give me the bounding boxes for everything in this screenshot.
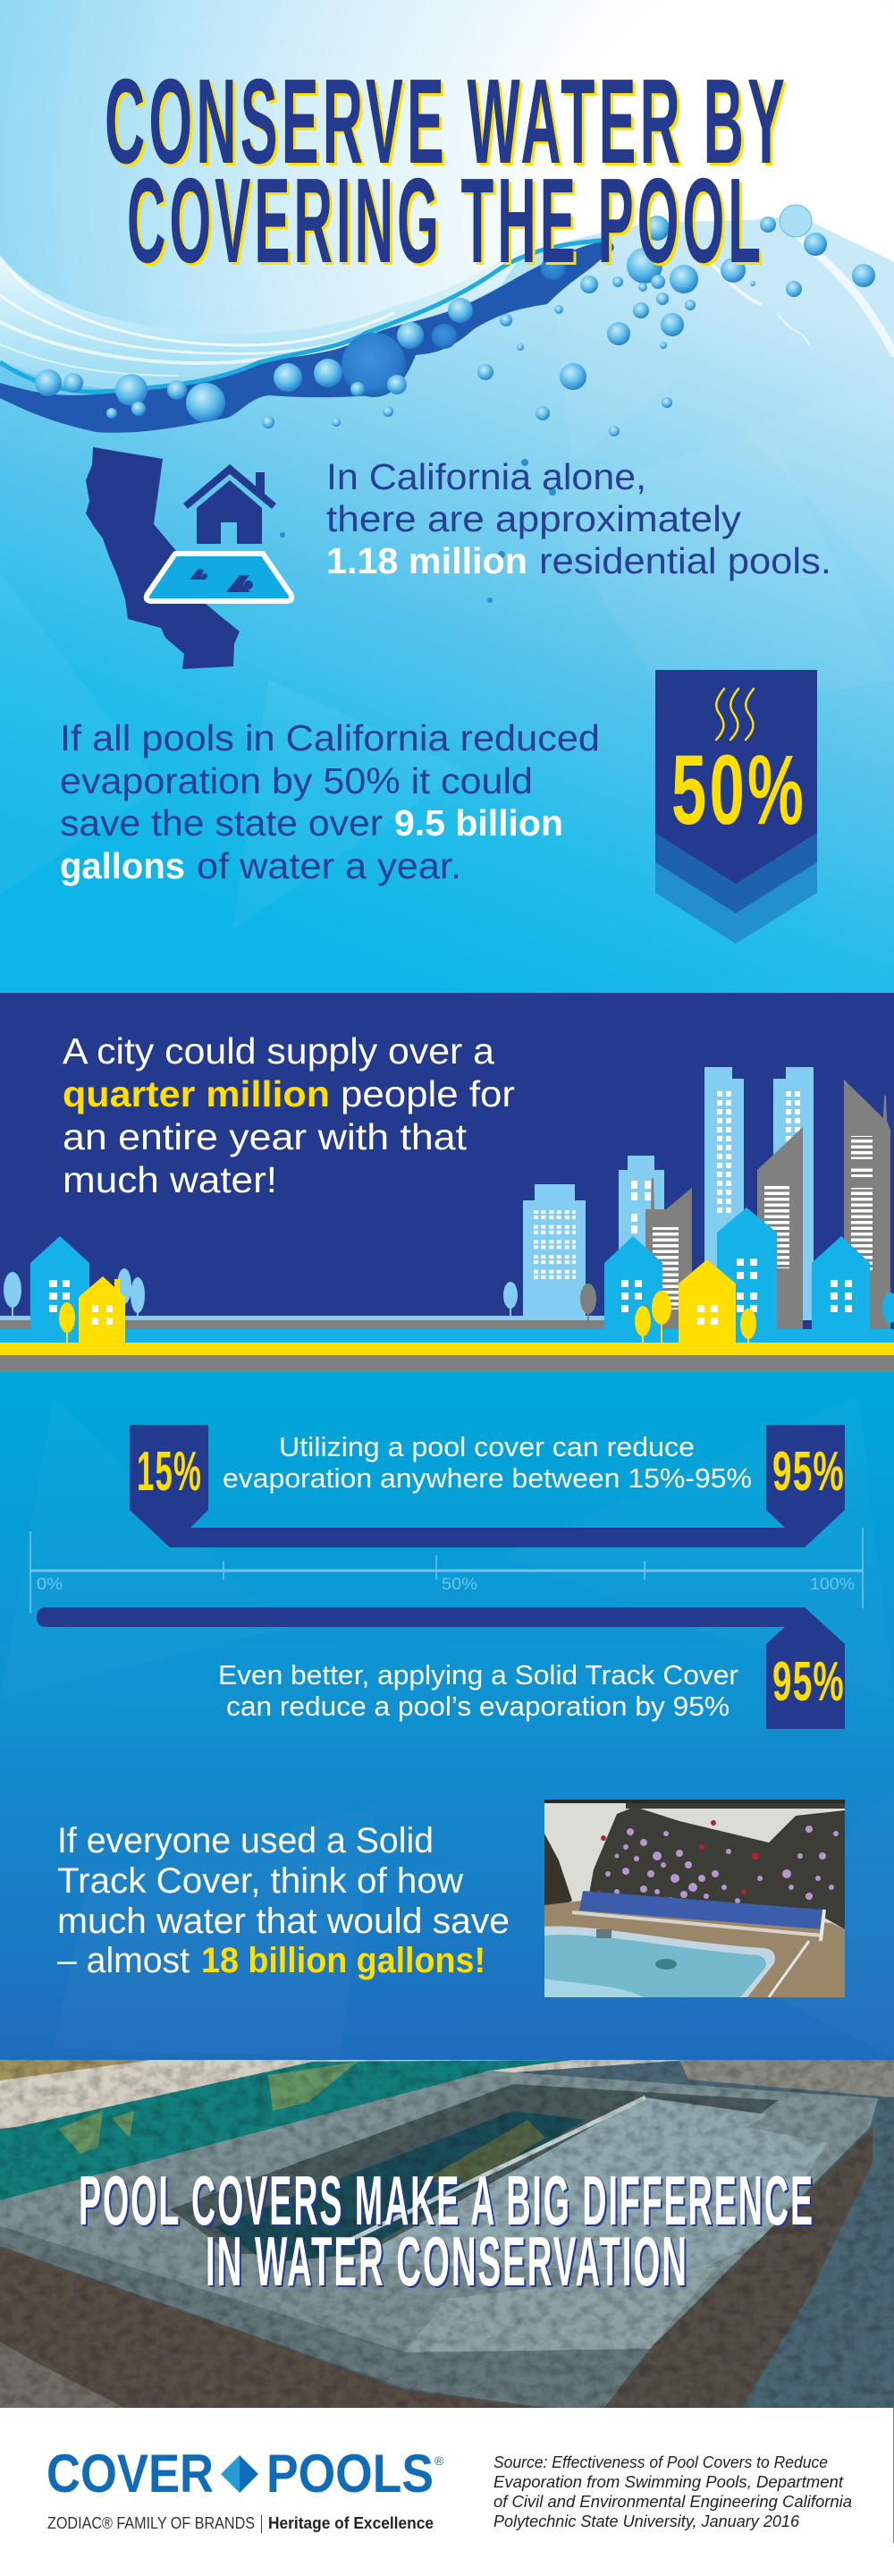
stat: 95% top: 95% [772, 1441, 845, 1503]
icon: house [183, 464, 276, 544]
text: California pools: residential pools. [539, 540, 831, 581]
percentage scale: 50% [442, 1575, 477, 1593]
text: evaporation savings [60, 717, 600, 886]
pool water [544, 1927, 775, 1997]
coping front face [0, 2226, 650, 2408]
text: pool cover range: Utilizing a pool cover can reduce [279, 1431, 695, 1462]
text: pool cover range: evaporation anywhere between 15%-95% [223, 1462, 752, 1494]
cover [349, 2097, 827, 2272]
text: California pools: there are approximately [326, 498, 742, 539]
text: California pools: In California alone, [326, 456, 646, 497]
background facets [0, 295, 894, 930]
text: 18 billion gallons: much water that would save [57, 1902, 510, 1941]
coping top [0, 2071, 878, 2352]
text: evaporation savings: evaporation by 50% it could [60, 760, 533, 801]
cyan band [0, 1329, 894, 1343]
icon: pool with swimmers [147, 554, 291, 601]
text: solid track cover [218, 1659, 738, 1722]
bubbles [35, 205, 875, 603]
ground bottom left [0, 2342, 125, 2408]
text: city supply: quarter million [63, 1073, 330, 1114]
road bands [0, 1343, 894, 1355]
pool opening [170, 2084, 778, 2254]
logo: Cover Pools: ® [434, 2453, 444, 2468]
tagline [47, 2514, 434, 2533]
text: 18 billion gallons: 18 billion gallons! [201, 1941, 485, 1980]
footer [0, 2408, 894, 2576]
stat: 50%: 50% [671, 735, 806, 845]
foam above wave [0, 237, 894, 388]
stone texture [0, 2060, 894, 2408]
text: 18 billion gallons: Track Cover, think of how [57, 1861, 463, 1901]
text: 18 billion gallons: If everyone used a Solid [57, 1821, 434, 1860]
text: city supply: an entire year with that [63, 1116, 468, 1157]
yellow trees [59, 1291, 756, 1343]
panel: cover effectiveness [0, 1372, 894, 2061]
text: 18 billion gallons: – almost [57, 1941, 190, 1980]
percentage scale: 0% [37, 1575, 63, 1593]
top water section [0, 0, 894, 995]
text: source: Evaporation from Swimming Pools, Department [493, 2473, 844, 2491]
text: California pools [326, 456, 831, 581]
logo: Cover Pools: COVER [46, 2444, 214, 2504]
text: city supply [63, 1030, 515, 1200]
skyline [0, 1067, 894, 1372]
logo: Cover Pools [46, 2444, 444, 2504]
text: source [493, 2453, 852, 2530]
tagline: ZODIAC® FAMILY OF BRANDS [47, 2514, 255, 2532]
water body below the wave [0, 215, 894, 995]
text: evaporation savings: of water a year. [197, 845, 461, 886]
concrete deck [544, 1901, 845, 1997]
text: evaporation savings: gallons [60, 845, 185, 886]
bracket: 95% solid track [37, 1607, 845, 1729]
text: pool cover range [223, 1431, 752, 1494]
gray towers [645, 1080, 890, 1329]
cyan houses [30, 1208, 870, 1333]
text: solid track cover: can reduce a pool’s evaporation by 95% [226, 1690, 730, 1722]
text: evaporation savings: 9.5 billion [394, 802, 563, 843]
icon: California with house and pool [86, 447, 291, 669]
foliage [586, 1807, 845, 1929]
icon: steam [716, 689, 754, 740]
dark wave band [0, 240, 614, 433]
cover roll [579, 1891, 823, 1929]
banner: 50 percent [655, 670, 817, 944]
bracket: 15% to 95% [130, 1425, 845, 1547]
stat: 15%: 15% [137, 1441, 202, 1503]
logo: Cover Pools: POOLS [266, 2444, 434, 2504]
text: source: of Civil and Environmental Engineering California [493, 2493, 852, 2511]
background facets [0, 1395, 894, 2057]
text: evaporation savings: save the state over [60, 802, 383, 843]
percentage scale: 100% [810, 1575, 855, 1593]
text: solid track cover: Even better, applying a Solid Track Cover [218, 1659, 738, 1690]
text: city supply: much water! [63, 1159, 277, 1200]
text: city supply: A city could supply over a [63, 1030, 494, 1072]
stone wall right [604, 2127, 873, 2408]
photo: pool with automatic cover [0, 2060, 894, 2408]
text: 18 billion gallons [57, 1821, 510, 1980]
teal water [0, 2060, 572, 2202]
stone wall left [0, 2246, 547, 2408]
tagline: Heritage of Excellence [268, 2514, 434, 2532]
percentage scale [30, 1528, 863, 1614]
panel: city [0, 993, 894, 1372]
flowers [605, 1826, 839, 1904]
icon: California map [86, 447, 240, 669]
stat: 95% bottom: 95% [772, 1651, 845, 1713]
yellow houses [79, 1259, 736, 1343]
title: big difference [80, 2175, 814, 2288]
wave bright edge [0, 240, 608, 392]
text: California pools: 1.18 million [326, 540, 527, 581]
trees [4, 1268, 894, 1329]
main title [105, 54, 791, 291]
light blue towers [523, 1067, 814, 1329]
photo: solid track cover on pool [544, 1800, 845, 1997]
text: evaporation savings: If all pools in California reduced [60, 717, 600, 758]
text: city supply: people for [341, 1073, 515, 1114]
far deck [0, 2060, 688, 2129]
right ground [742, 2098, 894, 2408]
text: source: Source: Effectiveness of Pool Covers to Reduce [493, 2453, 828, 2471]
text: source: Polytechnic State University, January 2016 [493, 2512, 800, 2530]
